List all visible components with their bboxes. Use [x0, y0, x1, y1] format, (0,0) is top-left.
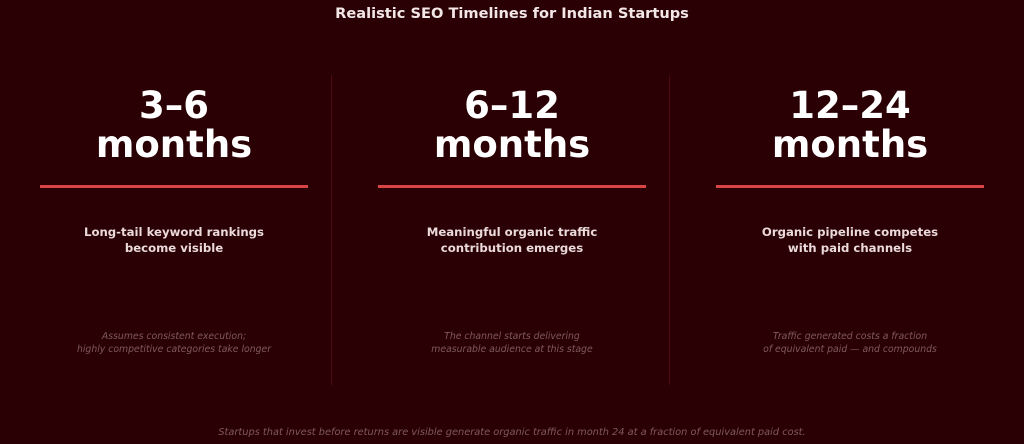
big number: 6–12 — [464, 84, 560, 127]
subtitle — [427, 225, 597, 255]
note — [763, 331, 937, 355]
big number — [434, 84, 590, 166]
big number: months — [772, 123, 928, 166]
note — [431, 331, 593, 355]
big number: 3–6 — [139, 84, 209, 127]
subtitle: contribution emerges — [441, 241, 583, 255]
panel: 3-6 months — [40, 84, 308, 355]
big number: 12–24 — [789, 84, 911, 127]
note: Assumes consistent execution; — [102, 331, 246, 342]
big number — [96, 84, 252, 166]
big number: months — [96, 123, 252, 166]
note: highly competitive categories take longer — [77, 344, 271, 355]
subtitle: Organic pipeline competes — [762, 225, 938, 239]
subtitle — [84, 225, 264, 255]
subtitle: become visible — [125, 241, 223, 255]
note: measurable audience at this stage — [431, 344, 593, 355]
note: Traffic generated costs a fraction — [773, 331, 927, 342]
note: of equivalent paid — and compounds — [763, 344, 937, 355]
subtitle: Meaningful organic traffic — [427, 225, 597, 239]
subtitle: with paid channels — [788, 241, 912, 255]
panel: 6-12 months — [378, 84, 646, 355]
panel: 12-24 months — [716, 84, 984, 355]
subtitle — [762, 225, 938, 255]
footer note: Startups that invest before returns are visible generate organic traffic in month 24 at a fraction of equivalent paid cost. — [218, 427, 806, 438]
big number: months — [434, 123, 590, 166]
note — [77, 331, 272, 355]
note: The channel starts delivering — [444, 331, 580, 342]
big number — [772, 84, 928, 166]
title: Realistic SEO Timelines for Indian Startups — [335, 5, 689, 22]
subtitle: Long-tail keyword rankings — [84, 225, 264, 239]
